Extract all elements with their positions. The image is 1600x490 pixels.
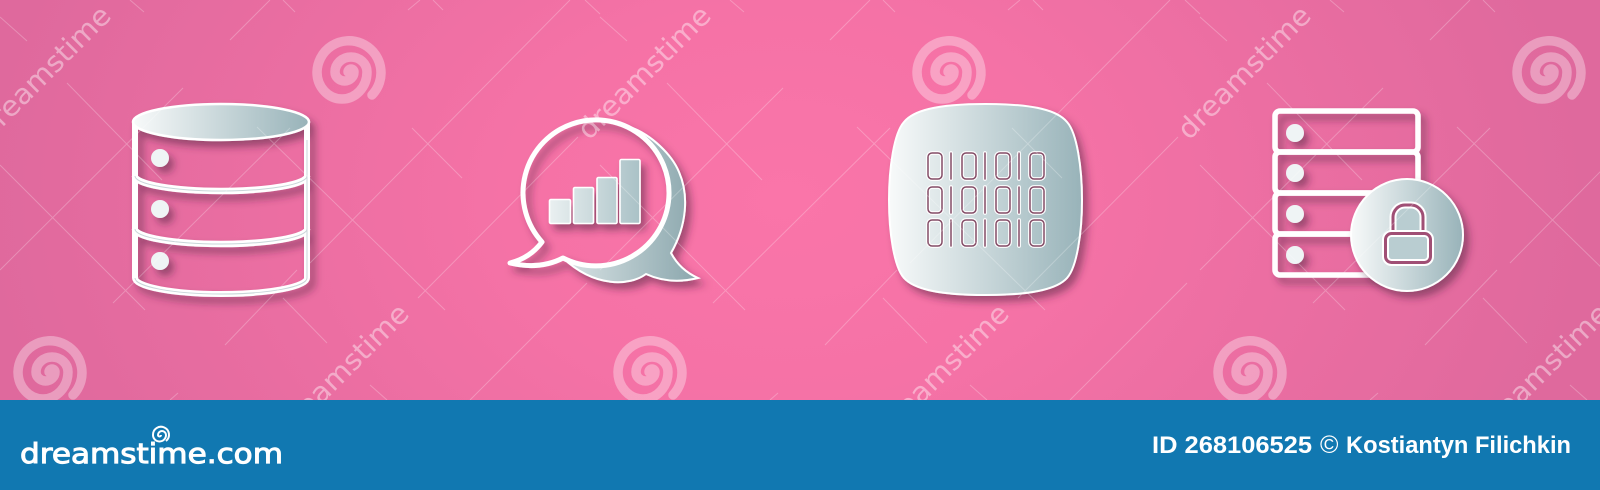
front bubble outline: [510, 120, 669, 266]
image id and credit: ©: [1320, 431, 1339, 459]
logo wordmark: dreamstime.com: [20, 437, 283, 470]
rack rows: [1275, 111, 1418, 275]
watermark text: dreamstime: [1171, 0, 1318, 146]
watermark text: dreamstime: [571, 0, 718, 146]
server rack: [1275, 111, 1418, 275]
image id and credit: [1152, 431, 1571, 459]
lock disc: [1351, 179, 1463, 291]
image id and credit: Kostiantyn Filichkin: [1346, 432, 1571, 459]
image id and credit: ID 268106525: [1152, 432, 1312, 459]
icon: server rack with padlock: [1275, 111, 1463, 291]
bar chart: [550, 160, 640, 224]
watermark text: dreamstime: [269, 297, 416, 444]
watermark text: dreamstime: [869, 297, 1016, 444]
logo spiral: [153, 427, 169, 442]
shackle: [1393, 205, 1423, 232]
band inner edge: [135, 140, 307, 294]
rear bubble: [563, 127, 698, 282]
padlock: [1386, 205, 1430, 262]
lock body: [1386, 234, 1430, 262]
cylinder top: [133, 104, 309, 140]
rack dots: [1286, 124, 1304, 264]
watermark spirals: [18, 41, 1581, 399]
icon: binary code tile: [889, 104, 1082, 295]
footer bar: [0, 400, 1600, 490]
binary digit shapes white edge: [928, 153, 1044, 246]
tile: [889, 104, 1082, 295]
icon: chat bubble with bar chart: [510, 120, 698, 282]
status dots: [151, 149, 169, 270]
binary digit shapes dark centre: [928, 153, 1044, 246]
cylinder walls: [135, 122, 307, 294]
icon: database cylinder: [133, 104, 309, 294]
cylinder bands: [135, 176, 307, 244]
